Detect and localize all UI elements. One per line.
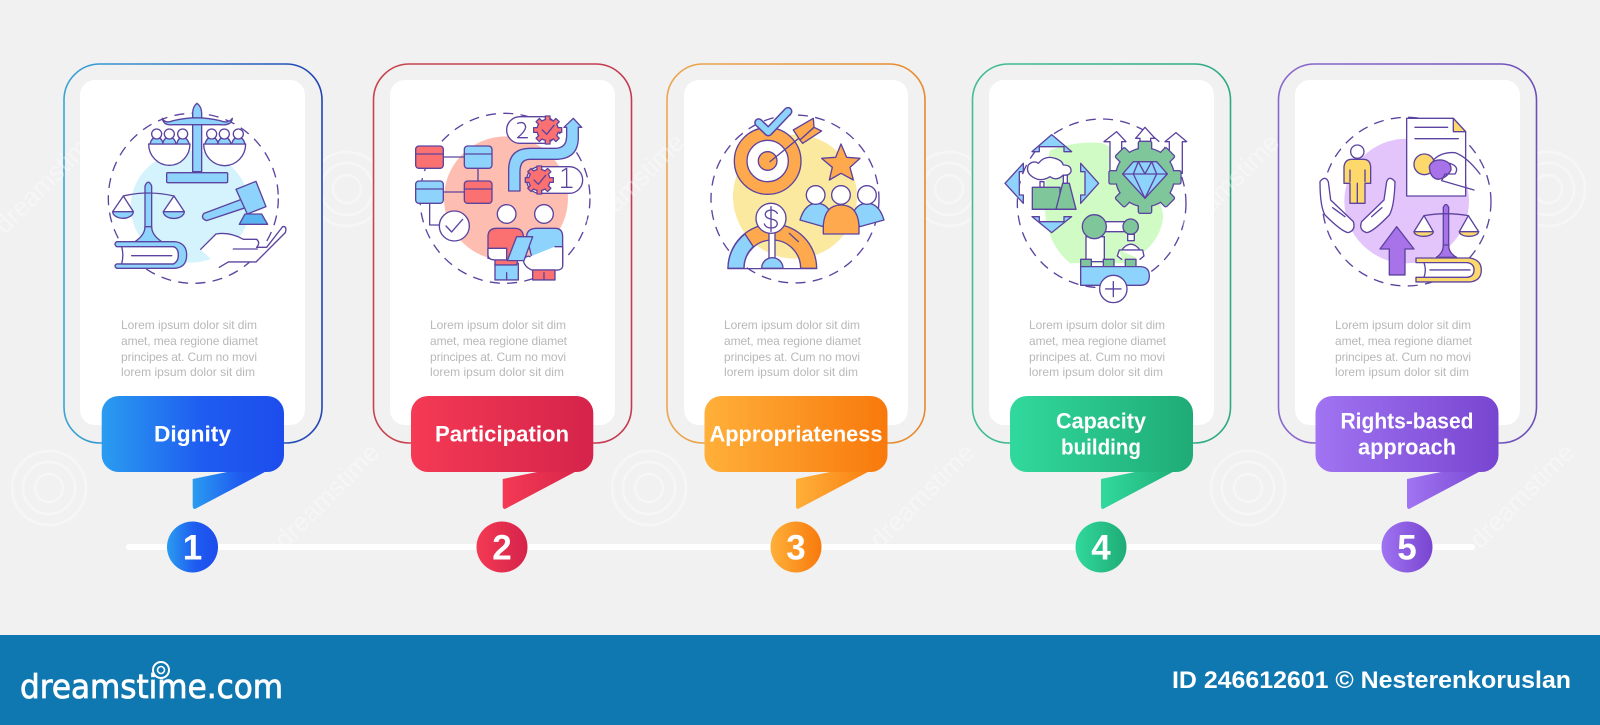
label: Rights-based approach bbox=[1316, 396, 1498, 509]
step number 3 bbox=[770, 522, 822, 572]
step number 3: 3 bbox=[786, 528, 806, 568]
watermark text: dreamstime bbox=[573, 127, 690, 244]
body text: amet, mea regione diamet bbox=[430, 334, 568, 348]
footer bar bbox=[0, 635, 1600, 725]
body text bbox=[1335, 318, 1473, 379]
label: Rights-based approach: approach bbox=[1358, 434, 1456, 460]
card frame bbox=[667, 64, 925, 443]
card frame bbox=[972, 64, 1230, 443]
body text: Lorem ipsum dolor sit dim bbox=[430, 318, 566, 332]
step number 2: 2 bbox=[492, 528, 512, 568]
watermark text: dreamstime bbox=[863, 437, 980, 554]
step number 4: 4 bbox=[1091, 528, 1111, 568]
body text: Lorem ipsum dolor sit dim bbox=[1029, 318, 1165, 332]
body text: amet, mea regione diamet bbox=[724, 334, 862, 348]
body text: Lorem ipsum dolor sit dim bbox=[121, 318, 257, 332]
card body bbox=[80, 80, 305, 425]
step number 5: 5 bbox=[1397, 528, 1417, 568]
body text: principes at. Cum no movi bbox=[724, 350, 860, 364]
body text bbox=[724, 318, 862, 379]
watermark text bbox=[0, 122, 1580, 554]
step number 4 bbox=[1076, 522, 1126, 572]
body text: amet, mea regione diamet bbox=[1335, 334, 1473, 348]
card body bbox=[1295, 80, 1520, 425]
body text: lorem ipsum dolor sit dim bbox=[724, 365, 858, 379]
card frame bbox=[374, 64, 632, 443]
card body bbox=[684, 80, 908, 425]
panel: capacity building bbox=[972, 64, 1230, 572]
label: Capacity building: Capacity bbox=[1056, 408, 1147, 434]
label: Capacity building bbox=[1010, 396, 1193, 509]
body text: lorem ipsum dolor sit dim bbox=[1335, 365, 1469, 379]
card body bbox=[989, 80, 1214, 425]
label: Appropriateness: Appropriateness bbox=[710, 422, 882, 446]
icon: target, star, people and gauge bbox=[711, 111, 884, 283]
body text: lorem ipsum dolor sit dim bbox=[121, 365, 255, 379]
icon: person in hands, document, scales and book bbox=[1320, 117, 1491, 286]
body text: amet, mea regione diamet bbox=[121, 334, 259, 348]
panel: participation bbox=[374, 64, 632, 572]
label: Capacity building: building bbox=[1061, 434, 1141, 460]
panel: dignity bbox=[64, 64, 322, 572]
label: Appropriateness bbox=[704, 396, 888, 509]
panel: rights-based approach bbox=[1278, 64, 1536, 572]
label: Dignity: Dignity bbox=[154, 422, 232, 446]
body text: lorem ipsum dolor sit dim bbox=[430, 365, 564, 379]
body text: principes at. Cum no movi bbox=[1335, 350, 1471, 364]
step number 2 bbox=[476, 522, 528, 572]
card frame bbox=[1278, 64, 1536, 443]
body text: amet, mea regione diamet bbox=[1029, 334, 1167, 348]
card frame bbox=[64, 64, 322, 443]
label: Participation: Participation bbox=[435, 422, 569, 446]
body text: Lorem ipsum dolor sit dim bbox=[1335, 318, 1471, 332]
body text bbox=[1029, 318, 1167, 379]
body text: principes at. Cum no movi bbox=[1029, 350, 1165, 364]
watermark text: dreamstime bbox=[1463, 437, 1580, 554]
watermark text: dreamstime bbox=[1168, 127, 1285, 244]
step number 5 bbox=[1382, 522, 1432, 572]
body text: principes at. Cum no movi bbox=[430, 350, 566, 364]
body text: lorem ipsum dolor sit dim bbox=[1029, 365, 1163, 379]
body text bbox=[121, 318, 259, 379]
icon: factory, gear with gem and robot arm bbox=[1005, 119, 1187, 303]
footer credit: ID 246612601 © Nesterenkoruslan bbox=[1172, 667, 1571, 694]
panel: appropriateness bbox=[667, 64, 925, 572]
step number 1 bbox=[167, 522, 218, 572]
label: Rights-based approach: Rights-based bbox=[1340, 408, 1474, 434]
body text bbox=[430, 318, 568, 379]
timeline line bbox=[126, 544, 1475, 550]
body text: Lorem ipsum dolor sit dim bbox=[724, 318, 860, 332]
label: Dignity bbox=[102, 396, 284, 509]
footer logo: dreamstime.com bbox=[20, 667, 283, 706]
icon: justice scales, gavel, book and hand bbox=[108, 103, 286, 283]
watermark text: dreamstime bbox=[268, 437, 385, 554]
body text: principes at. Cum no movi bbox=[121, 350, 257, 364]
step number 1: 1 bbox=[183, 528, 202, 568]
label: Participation bbox=[411, 396, 593, 509]
card body bbox=[390, 80, 615, 425]
icon: process flow and people bbox=[416, 113, 590, 283]
